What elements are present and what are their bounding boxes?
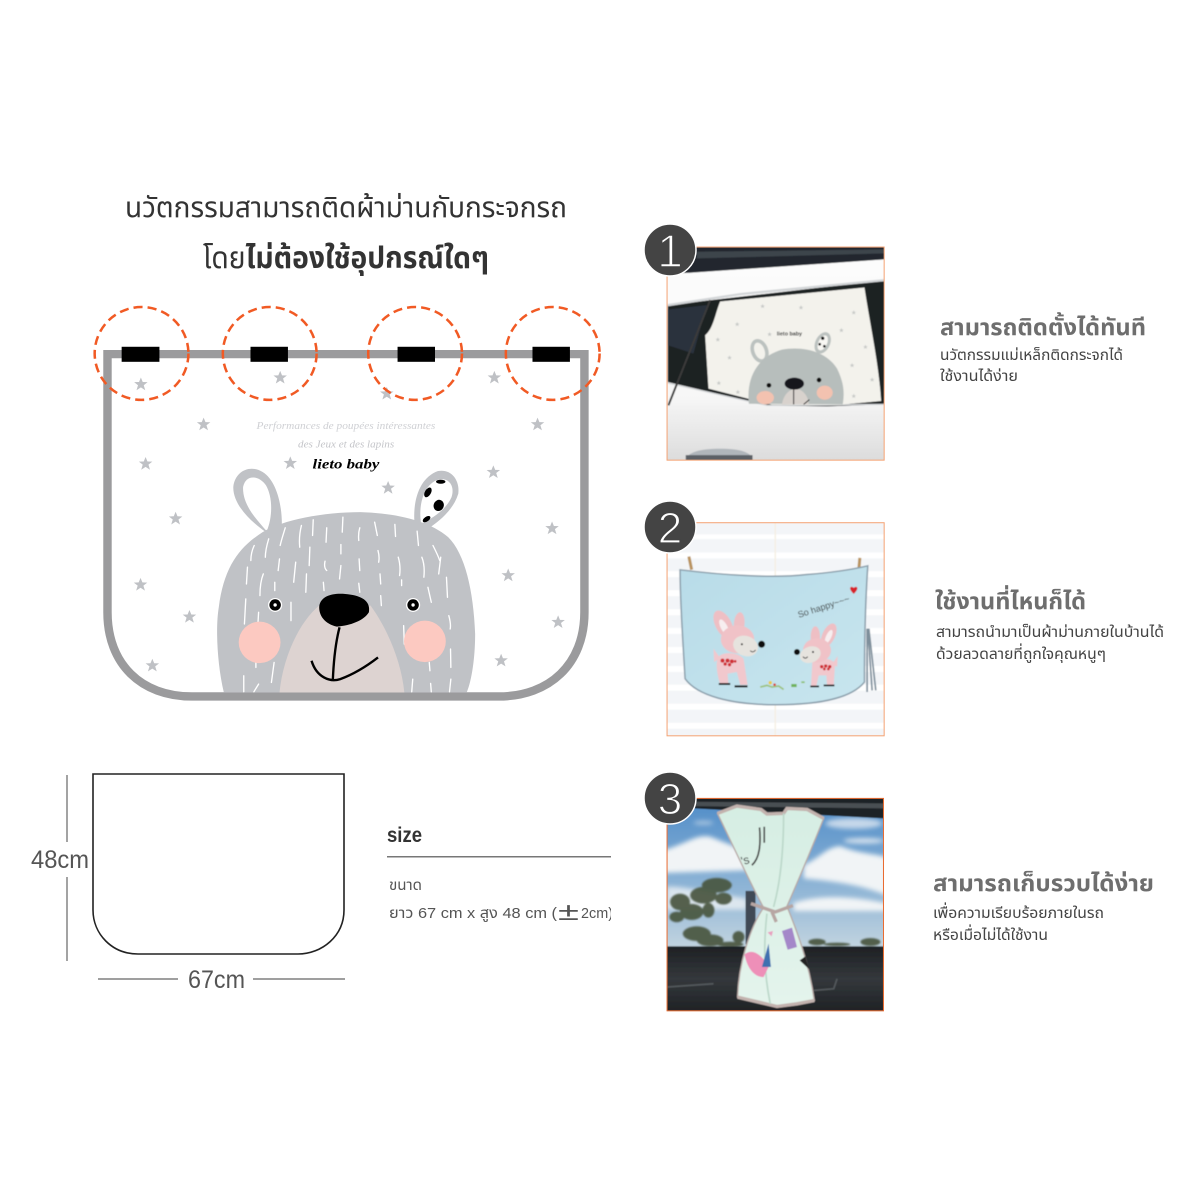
panel: photo 2 curtain on blinds xyxy=(667,522,884,736)
window chrome xyxy=(668,280,884,305)
icon: number badge 1 xyxy=(644,224,696,277)
curtain script text: lieto baby xyxy=(313,456,380,472)
eyes xyxy=(268,598,420,612)
text block: feature 1 xyxy=(940,312,1146,385)
muzzle xyxy=(280,602,404,692)
panel: curtain illustration with magnets xyxy=(95,307,600,696)
curtain script text: des Jeux et des lapins xyxy=(298,439,394,451)
dashed orange circles xyxy=(95,307,600,400)
heart xyxy=(850,587,857,594)
small bear: lieto baby xyxy=(777,332,802,338)
fur marks xyxy=(244,517,451,692)
door panel xyxy=(667,946,884,1011)
hanging ties xyxy=(867,629,876,692)
curtain script text xyxy=(256,420,435,472)
grass and flowers xyxy=(760,681,805,689)
size text block: ± xyxy=(558,898,579,926)
window blinds xyxy=(667,534,884,729)
curtain fold shadow xyxy=(765,813,784,1004)
deer left xyxy=(709,607,765,686)
size text block: size xyxy=(387,824,422,847)
ribbon tie xyxy=(751,904,793,922)
deer right xyxy=(794,621,840,686)
curtain prints xyxy=(739,827,809,977)
size diagram xyxy=(31,774,345,994)
text block: feature 3: สามารถเก็บรวบได้ง่าย xyxy=(933,870,1154,896)
icon: number badge 3 xyxy=(644,772,696,824)
curtain trim xyxy=(717,806,824,1006)
title: heading: โดยไม่ต้องใช้อุปกรณ์ใดๆ xyxy=(203,242,489,276)
icon: number badge 1: 1 xyxy=(657,225,683,277)
small stars xyxy=(715,304,874,398)
icon: number badge 2 xyxy=(644,501,696,553)
magnets xyxy=(122,347,570,362)
panel: photo 3 tied curtain in car xyxy=(663,798,887,1011)
panel: photo 1 curtain on car window xyxy=(667,247,884,460)
size text block: ขนาด xyxy=(389,877,422,894)
sky xyxy=(667,798,884,948)
mint curtain xyxy=(717,806,824,1006)
text block: feature 3 xyxy=(933,870,1154,944)
curtain script text: Performances de poupées intéressantes xyxy=(256,420,435,432)
roof bar xyxy=(693,798,884,818)
height dimension: 48cm xyxy=(31,846,89,874)
clothes pegs xyxy=(687,556,861,571)
bear face xyxy=(217,469,475,692)
text block: feature 2: สามารถนำมาเป็นผ้าม่านภายในบ้านได้ xyxy=(936,623,1164,641)
roof trim xyxy=(667,247,884,273)
size text block: ยาว 67 cm x สูง 48 cm ( xyxy=(389,905,557,922)
text block: feature 2: ด้วยลวดลายที่ถูกใจคุณหนูๆ xyxy=(936,643,1106,663)
icon: number badge 3: 3 xyxy=(658,775,682,824)
so happy text: So happy~~~ xyxy=(797,594,851,620)
text block: feature 3: เพื่อความเรียบร้อยภายในรถ xyxy=(933,902,1104,922)
text block: feature 1: นวัตกรรมแม่เหล็กติดกระจกได้ xyxy=(940,346,1123,364)
fabric xyxy=(705,287,881,405)
text block: feature 1: สามารถติดตั้งได้ทันที xyxy=(940,312,1146,340)
icon: number badge 2: 2 xyxy=(658,504,682,553)
headrest behind xyxy=(746,891,756,944)
cheeks xyxy=(239,622,281,663)
small bear xyxy=(747,330,844,404)
tree xyxy=(669,878,880,947)
size text block xyxy=(387,824,613,926)
clouds xyxy=(663,818,887,911)
blue fabric xyxy=(680,566,868,705)
nose xyxy=(319,594,369,627)
text block: feature 3: หรือเมื่อไม่ได้ใช้งาน xyxy=(933,924,1048,944)
curtain body outline xyxy=(107,354,584,696)
text block: feature 2: ใช้งานที่ไหนก็ได้ xyxy=(935,585,1086,614)
curtain prints: 's xyxy=(739,852,751,868)
door handle xyxy=(689,448,750,456)
title: heading: นวัตกรรมสามารถติดผ้าม่านกับกระจกรถ xyxy=(125,192,567,224)
stars pattern xyxy=(134,371,565,671)
curtain shape outline xyxy=(93,774,344,954)
text block: feature 2 xyxy=(935,585,1164,663)
window glass xyxy=(668,280,884,406)
title: heading xyxy=(125,192,567,276)
text block: feature 1: ใช้งานได้ง่าย xyxy=(940,367,1018,385)
width dimension: 67cm xyxy=(188,966,245,994)
size text block: 2cm) xyxy=(581,905,613,922)
mouth xyxy=(312,627,378,681)
